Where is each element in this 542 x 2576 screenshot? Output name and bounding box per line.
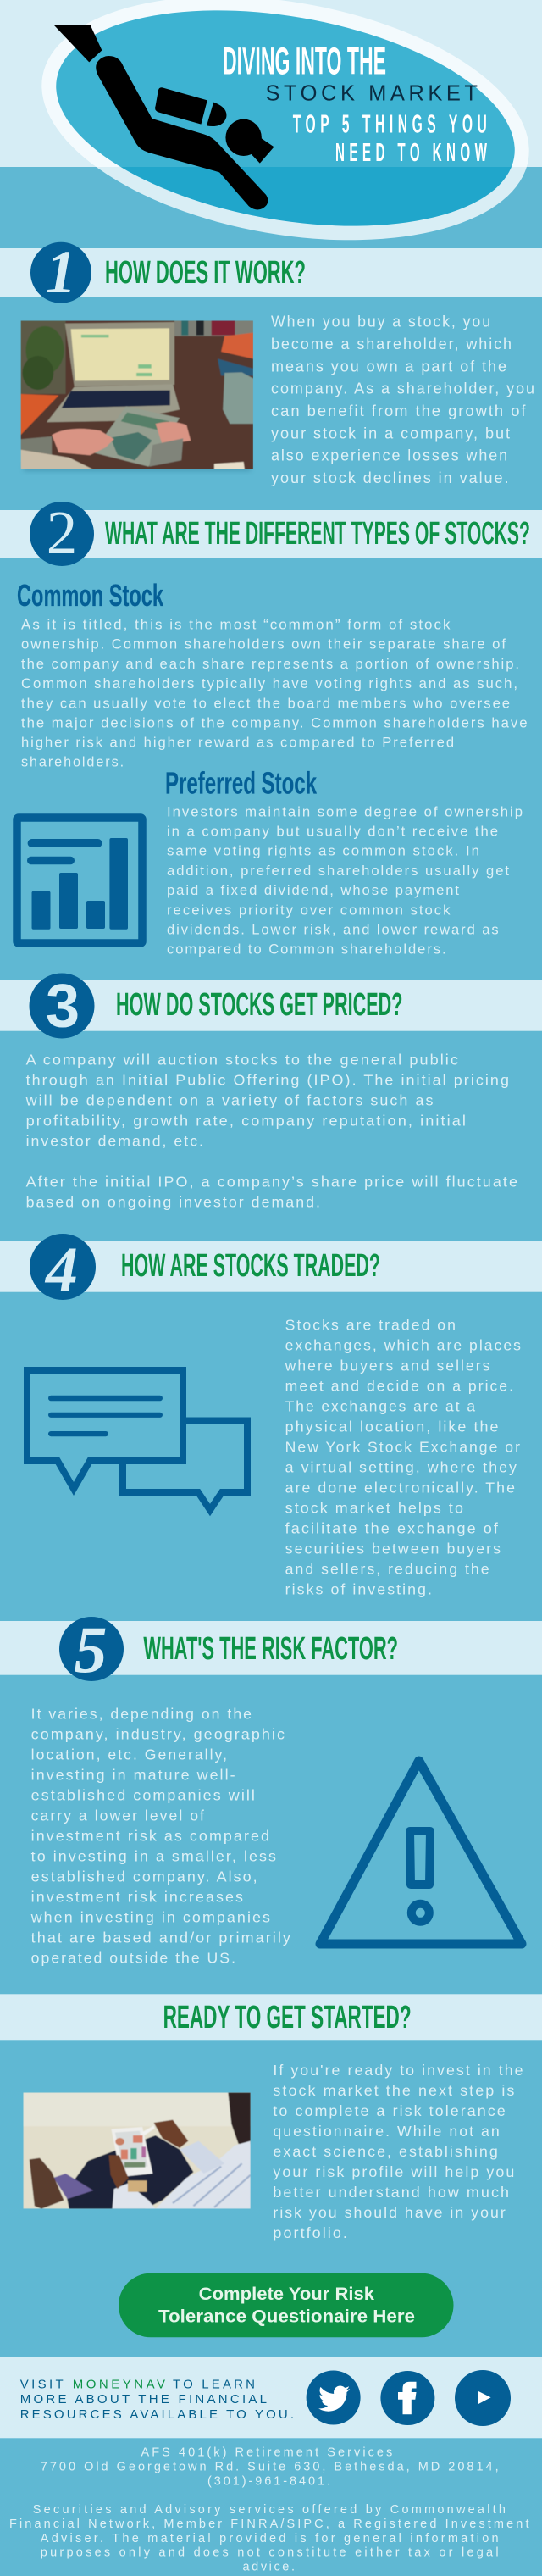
section 5 text: established companies will — [31, 1786, 257, 1803]
ready to get started text: stock market the next step is — [273, 2082, 516, 2099]
footer disclaimer: Financial Network, Member FINRA/SIPC, a Registered Investment — [9, 2518, 530, 2531]
section 1 text — [271, 313, 536, 486]
section 4 text: risks of investing. — [285, 1580, 434, 1597]
footer band — [0, 2357, 542, 2438]
common stock text — [21, 617, 528, 770]
header panel — [0, 0, 542, 241]
section 4 header — [0, 1234, 542, 1306]
footer address — [41, 2446, 501, 2488]
section 1 text: can benefit from the growth of — [271, 402, 527, 419]
icon: facebook — [380, 2371, 434, 2425]
ready to get started text: to complete a risk tolerance — [273, 2102, 507, 2119]
section 5 text: operated outside the US. — [31, 1949, 237, 1966]
section 3 text: investor demand, etc. — [26, 1133, 205, 1150]
icon: scuba diver — [54, 25, 274, 209]
section 5 text: investment risk increases — [31, 1888, 245, 1905]
section 5 header: 5 — [75, 1613, 107, 1686]
visit moneynav text: MORE ABOUT THE FINANCIAL — [20, 2392, 267, 2407]
section 4 text: meet and decide on a price. — [285, 1377, 515, 1394]
preferred stock text: receives priority over common stock — [167, 902, 452, 918]
section 1 header — [0, 238, 542, 306]
icon: twitter — [307, 2371, 361, 2425]
visit moneynav text: VISIT — [20, 2377, 64, 2391]
visit moneynav text — [20, 2377, 294, 2422]
section 4 text: securities between buyers — [285, 1540, 502, 1557]
visit moneynav text: TO LEARN — [173, 2377, 255, 2391]
section 1 text: company. As a shareholder, you — [271, 380, 536, 397]
preferred stock text: same voting rights as common stock. In — [167, 843, 481, 859]
section 2 header — [0, 498, 542, 567]
section 3 text: will be dependent on a variety of factors such as — [25, 1092, 435, 1109]
button: questionnaire call to action — [119, 2273, 454, 2337]
section 3 header — [0, 973, 542, 1041]
section 5 text: established company. Also, — [31, 1868, 259, 1885]
ready to get started text: better understand how much — [273, 2184, 511, 2201]
section 1 text: means you own a part of the — [271, 357, 508, 375]
section 4 header: 4 — [44, 1235, 78, 1306]
common stock text: higher risk and higher reward as compared to Preferred — [21, 735, 456, 751]
section 1 text: become a shareholder, which — [271, 335, 513, 353]
section 5 text: to investing in a smaller, less — [31, 1847, 278, 1864]
preferred stock text: dividends. Lower risk, and lower reward as — [167, 921, 501, 937]
icon: speech bubbles — [27, 1370, 247, 1510]
title: STOCK MARKET — [266, 81, 478, 105]
ready to get started header — [0, 1994, 542, 2040]
common stock text: Common shareholders typically have voting rights and as such, — [21, 675, 519, 691]
section 5 text: location, etc. Generally, — [31, 1746, 229, 1763]
common stock text: ownership. Common shareholders own their separate share of — [21, 636, 507, 652]
section 4 text: The exchanges are at a — [285, 1397, 477, 1414]
section 4 text: exchanges, which are places — [285, 1336, 523, 1353]
section 4 text: stock market helps to — [285, 1499, 465, 1516]
footer disclaimer: Adviser. The material provided is for general information — [41, 2532, 501, 2545]
preferred stock text: Investors maintain some degree of ownership — [167, 803, 524, 819]
ready to get started text — [273, 2062, 525, 2241]
title — [223, 39, 491, 167]
section 5 header — [0, 1613, 542, 1686]
section 4 text: a virtual setting, where they — [285, 1458, 518, 1475]
visit moneynav text: MONEYNAV — [73, 2377, 165, 2391]
section 4 text: are done electronically. The — [285, 1479, 517, 1496]
footer disclaimer — [9, 2503, 530, 2573]
title: DIVING INTO THE — [223, 39, 386, 82]
common stock text: the company and each share represents a portion of ownership. — [21, 656, 521, 672]
section 3 header: 3 — [46, 973, 80, 1041]
section 1 text: your stock in a company, but — [271, 424, 512, 441]
section 4 text — [285, 1316, 523, 1597]
icon: chart report — [17, 818, 142, 943]
section 4 text: physical location, like the — [285, 1418, 501, 1435]
visit moneynav text: RESOURCES AVAILABLE TO YOU. — [20, 2407, 294, 2422]
section 4 text: New York Stock Exchange or — [285, 1438, 522, 1455]
preferred stock text — [167, 803, 524, 958]
ready to get started text: exact science, establishing — [273, 2143, 500, 2160]
section 5 text: carry a lower level of — [31, 1807, 206, 1824]
section 3 text: based on ongoing investor demand. — [26, 1194, 322, 1211]
preferred stock text: paid a fixed dividend, whose payment — [167, 882, 461, 898]
section 3 text: profitability, growth rate, company reputation, initial — [26, 1113, 467, 1130]
section 5 text: company, industry, geographic — [31, 1725, 286, 1742]
section 3 text: A company will auction stocks to the general public — [26, 1052, 460, 1069]
common stock text: the major decisions of the company. Common shareholders have — [21, 714, 528, 730]
ready to get started text: your risk profile will help you — [273, 2163, 516, 2180]
section 5 text — [30, 1705, 292, 1966]
ready to get started text: If you're ready to invest in the — [273, 2062, 525, 2079]
ready to get started text: questionnaire. While not an — [273, 2123, 501, 2140]
preferred stock text: in a company but usually don’t receive the — [167, 824, 500, 840]
button: questionnaire call to action: Tolerance Questionaire Here — [158, 2307, 415, 2327]
section 5 text: It varies, depending on the — [31, 1705, 253, 1722]
ready to get started text: risk you should have in your — [273, 2204, 507, 2221]
ready to get started text: portfolio. — [273, 2224, 349, 2241]
icon: warning triangle — [320, 1761, 522, 1944]
section 3 text: After the initial IPO, a company’s share price will fluctuate — [26, 1174, 519, 1191]
section 1 text: also experience losses when — [271, 447, 509, 464]
heading: preferred stock: Preferred Stock — [165, 766, 318, 801]
footer address: AFS 401(k) Retirement Services — [141, 2446, 394, 2459]
section 1 text: your stock declines in value. — [271, 469, 510, 486]
preferred stock text: addition, preferred shareholders usually get — [167, 863, 511, 879]
section 1 header: HOW DOES IT WORK? — [105, 255, 306, 291]
section 5 text: investment risk as compared — [31, 1827, 271, 1844]
icon: youtube play — [455, 2370, 511, 2426]
section 1 text: When you buy a stock, you — [271, 313, 492, 330]
photo: laptop and calculator on desk — [20, 320, 253, 471]
heading: common stock: Common Stock — [17, 578, 164, 613]
section 4 text: facilitate the exchange of — [285, 1519, 500, 1536]
preferred stock text: compared to Common shareholders. — [167, 941, 448, 958]
footer disclaimer: Securities and Advisory services offered by Commonwealth — [33, 2503, 507, 2517]
section 5 text: that are based and/or primarily — [31, 1929, 292, 1946]
footer disclaimer: purposes only and does not constitute either tax or legal — [41, 2546, 501, 2560]
section 2 header: 2 — [47, 498, 77, 567]
common stock text: they can usually vote to elect the board members who oversee — [21, 695, 512, 711]
section 3 text — [25, 1052, 519, 1211]
photo: person with tablet — [23, 2092, 251, 2209]
section 4 text: Stocks are traded on — [285, 1316, 457, 1333]
section 3 text: through an Initial Public Offering (IPO). The initial pricing — [26, 1072, 511, 1089]
footer address: 7700 Old Georgetown Rd. Suite 630, Bethesda, MD 20814, — [41, 2460, 501, 2473]
section 1 header: 1 — [46, 238, 76, 306]
button: questionnaire call to action: Complete Your Risk — [199, 2285, 374, 2304]
section 4 text: and sellers, reducing the — [285, 1560, 491, 1577]
section 4 text: where buyers and sellers — [285, 1357, 491, 1374]
footer address: (301)-961-8401. — [207, 2474, 332, 2488]
section 5 text: investing in mature well- — [31, 1766, 237, 1783]
footer disclaimer: advice. — [242, 2560, 296, 2573]
common stock text: As it is titled, this is the most “common” form of stock — [21, 617, 452, 633]
section 5 text: when investing in companies — [30, 1908, 272, 1925]
common stock text: shareholders. — [21, 754, 125, 770]
